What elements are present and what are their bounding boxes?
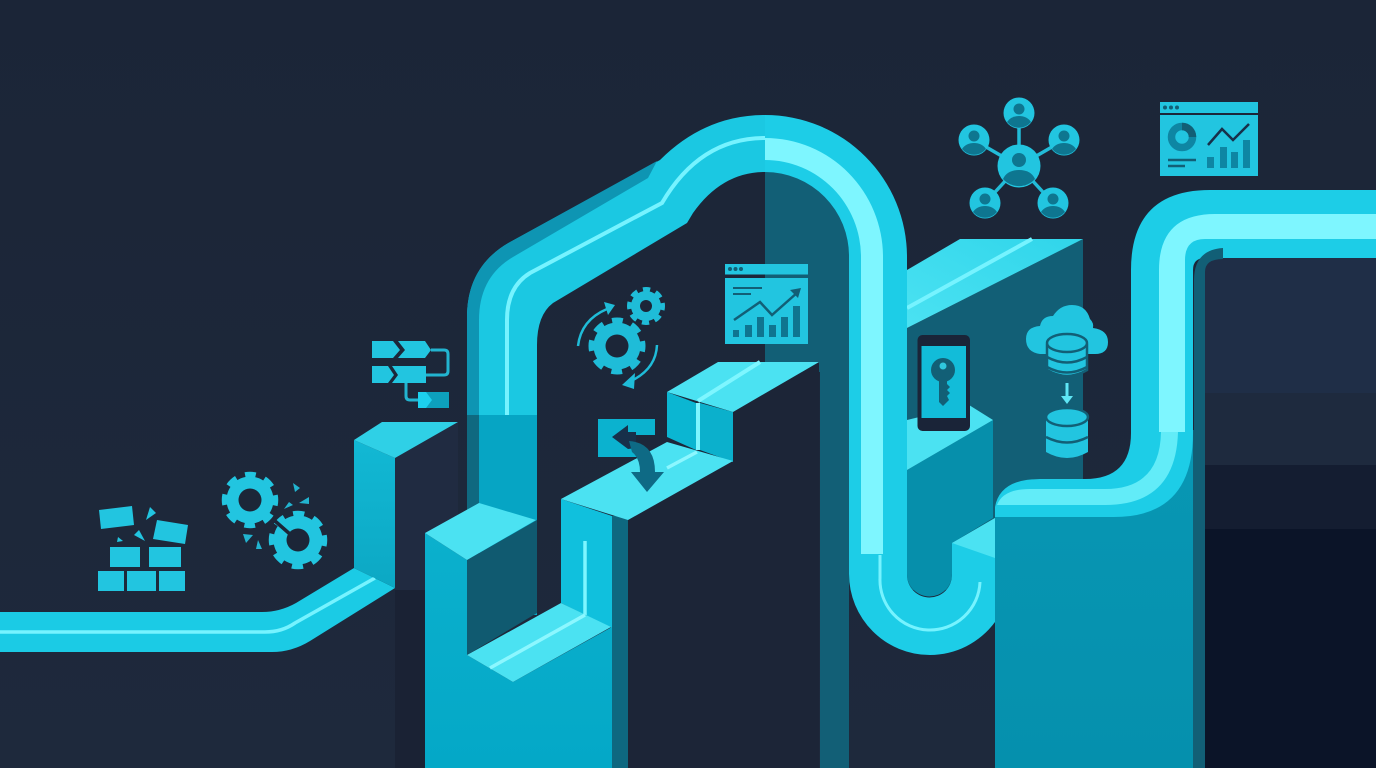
icon: return and down arrows — [598, 419, 664, 492]
dark stair mass — [628, 362, 819, 768]
shadow side of first step — [395, 422, 458, 768]
icon: broken gears — [225, 475, 324, 566]
step: first riser — [354, 422, 458, 588]
icon: cloud database — [1026, 305, 1108, 458]
stairs: lower block and tread — [425, 503, 612, 768]
block: lower right column — [995, 430, 1205, 768]
step: phone platform — [907, 405, 993, 596]
pipe: arch left rising section — [467, 115, 765, 615]
icon: people network — [958, 98, 1080, 218]
panel: right stacked dark panels — [1205, 258, 1376, 768]
icon: rotating gears — [578, 290, 662, 389]
platform: upper right teal wall — [907, 239, 1083, 590]
icon: phone with key — [918, 335, 970, 431]
icon: broken brick wall — [98, 506, 188, 591]
icon: process flow — [372, 341, 449, 408]
icon: analytics window — [725, 264, 808, 344]
stairs: upper tread — [667, 362, 819, 462]
pipe: arch right and U bend — [765, 115, 995, 655]
stairs: middle tread — [561, 442, 733, 768]
teal wall inside arch — [765, 172, 849, 768]
icon: dashboard window — [1160, 102, 1258, 176]
pipe: right section — [995, 190, 1376, 517]
pipe: lower left run — [0, 568, 395, 652]
